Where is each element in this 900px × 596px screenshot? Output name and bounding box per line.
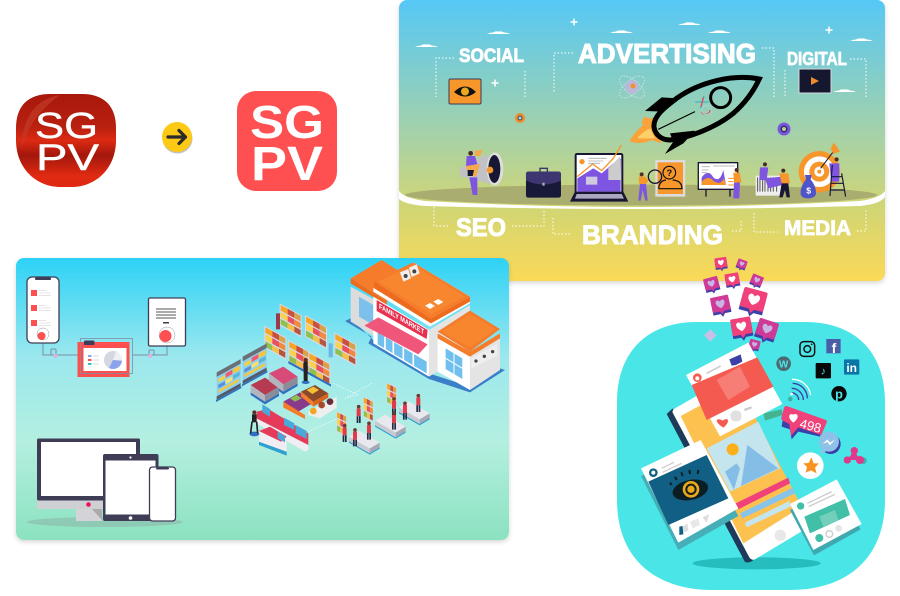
icon: magnifier and question card — [638, 160, 685, 201]
platform ellipse — [399, 184, 885, 209]
phone — [667, 377, 807, 562]
icon: pink share — [844, 447, 867, 464]
dotted aisle lines — [308, 383, 372, 432]
heading: BRANDING: BRANDING — [582, 220, 723, 250]
icon: messenger bubble — [819, 432, 841, 454]
awning — [364, 317, 428, 354]
red post card — [686, 343, 783, 436]
heading: DIGITAL: DIGITAL — [787, 49, 847, 69]
icon: megaphone person — [460, 150, 503, 195]
heading: ADVERTISING: ADVERTISING — [578, 38, 756, 69]
icon: eye card — [449, 79, 481, 104]
AC units — [400, 269, 411, 282]
icon: facebook: f — [832, 340, 837, 356]
icon: phone list — [27, 277, 59, 343]
icon: magnifier and question card: ? — [666, 168, 672, 178]
icon: purple gear — [778, 122, 790, 136]
icon: tablet — [103, 454, 158, 521]
panel: digital marketing banner — [399, 0, 885, 281]
floating heart bubbles — [703, 257, 779, 353]
icon: laptop chart — [570, 145, 628, 202]
checkouts and shoppers — [276, 313, 430, 455]
electronics counters — [249, 404, 308, 456]
icon: star badge — [797, 452, 824, 479]
rocket — [630, 77, 759, 154]
old SGPV logo — [16, 94, 116, 187]
icon: instagram — [800, 342, 815, 356]
panel: supermarket and devices — [16, 258, 509, 540]
old SGPV logo: PV — [36, 137, 99, 178]
like counter bubble — [781, 406, 827, 439]
windows — [378, 332, 427, 373]
small green post card — [790, 479, 862, 555]
supermarket illustration — [216, 260, 505, 456]
produce tables — [251, 367, 337, 419]
social icons — [776, 339, 859, 401]
new SGPV logo — [237, 91, 337, 191]
arrow icon — [162, 122, 192, 154]
icon: presentation board — [698, 163, 741, 198]
icon: target with dart and money bag: $ — [806, 186, 811, 196]
heading: SOCIAL: SOCIAL — [459, 45, 524, 67]
icon: orange gear — [515, 113, 525, 123]
clouds and sparkles — [415, 18, 873, 92]
icon: tiktok: ♪ — [821, 366, 826, 378]
connector lines — [43, 335, 167, 355]
old SGPV logo: SG — [35, 105, 98, 146]
marketing illustrations row — [460, 143, 846, 202]
devices — [27, 438, 183, 527]
shadow under phone — [693, 557, 821, 569]
icon: phone — [150, 467, 176, 521]
flow diagram — [27, 277, 186, 377]
icon: linkedin: in — [846, 361, 857, 375]
icon: document — [148, 298, 186, 346]
building: FAMILY MARKET — [379, 302, 424, 336]
icon: desktop monitor — [37, 438, 140, 521]
icon: pinterest: p — [835, 387, 843, 401]
icon: target with dart and money bag — [799, 143, 846, 198]
new SGPV logo: PV — [251, 138, 323, 191]
icon: barcode and buyers — [756, 162, 790, 197]
icon: briefcase — [526, 168, 561, 198]
icon: wordpress: W — [779, 360, 789, 371]
new SGPV logo: SG — [250, 96, 324, 148]
eye post card — [641, 440, 738, 550]
sign — [377, 300, 428, 339]
like counter bubble: 498 — [798, 416, 823, 436]
icon: video card — [799, 69, 831, 93]
fridges — [216, 343, 267, 402]
right wing — [438, 338, 470, 390]
heading: MEDIA: MEDIA — [784, 217, 851, 240]
teal blob — [617, 322, 885, 590]
heading: SEO: SEO — [456, 214, 506, 242]
icon: wifi waves — [788, 379, 811, 401]
icon: atom — [616, 72, 648, 102]
icon: dashboard window — [78, 338, 132, 377]
image card — [707, 422, 780, 492]
building — [345, 260, 505, 392]
shelves — [264, 303, 356, 387]
dotted connectors — [434, 48, 866, 234]
panel: social media — [617, 257, 885, 590]
